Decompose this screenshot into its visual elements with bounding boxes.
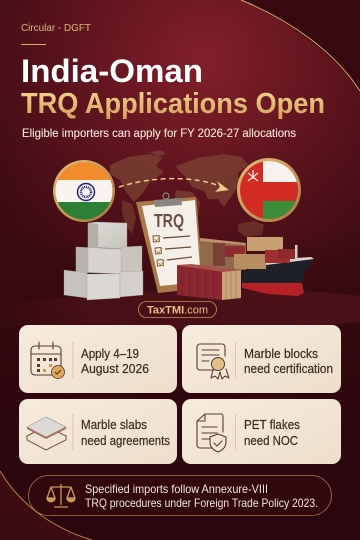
subtitle: Eligible importers can apply for FY 2026-27 allocations [22,126,296,140]
icon: marble slabs [27,417,66,450]
world map [110,150,264,237]
title: TRQ Applications Open [21,88,325,120]
decorative gold curve bottom left [0,471,92,540]
footer text [85,482,318,510]
shipping container [177,264,241,300]
title: India-Oman [21,53,203,89]
card text [81,417,170,448]
card text: need NOC [244,433,298,448]
panel: apply dates [19,325,177,393]
floor [0,290,360,330]
decorative gold curve top right [241,0,360,91]
clipboard checklist: TRQ [154,211,184,231]
footer text: TRQ procedures under Foreign Trade Policy 2023. [85,496,318,510]
card text [244,417,300,448]
brand pill [138,302,216,318]
icon: scales of justice [47,484,75,507]
icon: Oman flag [237,158,301,222]
icon: document with shield [197,414,226,452]
card text [81,346,149,376]
icon: India flag [53,160,115,222]
accent rule [21,44,46,45]
card text: August 2026 [81,361,149,376]
eyebrow label: Circular - DGFT [21,23,92,34]
icon: calendar [31,342,64,378]
icon: certificate [197,344,229,379]
panel: marble slabs [19,399,177,464]
card text: Marble blocks [244,346,318,361]
brand pill: TaxTMI.com [147,304,208,316]
card text: need agreements [81,433,170,448]
card text [244,346,333,376]
cargo ship [200,237,314,296]
card text: Marble slabs [81,417,147,432]
marble blocks [64,222,143,300]
card text: Apply 4–19 [81,346,139,361]
card text: need certification [244,361,333,376]
dashed route arrow [119,179,229,192]
panel: marble blocks certification [182,325,341,393]
footer text: Specified imports follow Annexure-VIII [85,482,268,496]
card text: PET flakes [244,417,300,432]
panel: PET flakes [182,399,341,464]
title [21,53,325,120]
clipboard checklist [136,193,204,293]
panel: footer note [28,476,332,516]
